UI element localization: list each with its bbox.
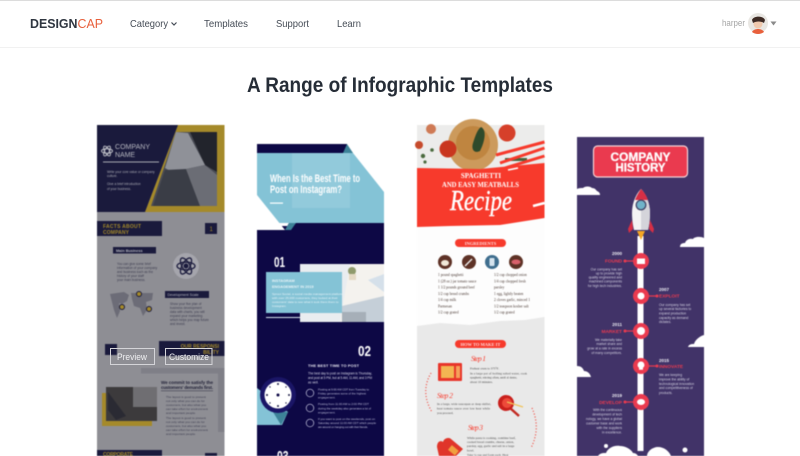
ingredient list: parsley bbox=[494, 286, 505, 290]
cover block bbox=[97, 125, 224, 212]
step 2 bbox=[437, 391, 523, 416]
brush banner bbox=[417, 142, 544, 227]
cover block: When Is the Best Time to bbox=[270, 173, 360, 185]
commitment block: and important people. bbox=[166, 411, 196, 415]
dotted arrow left bbox=[426, 373, 432, 412]
development scale block: expand your marketing bbox=[170, 314, 203, 318]
best time list: Friday generates some of the highest bbox=[318, 392, 366, 396]
logo: DESIGNCAP bbox=[30, 17, 103, 31]
milestone 2000: quality engineered and bbox=[589, 276, 622, 280]
main business block: Main Business bbox=[116, 249, 143, 253]
button: preview: Preview bbox=[117, 352, 147, 363]
section 01 bbox=[266, 254, 384, 322]
commitment block: can take effort for environment bbox=[166, 428, 208, 432]
section 01: with over 25,000 customers, they looked at their bbox=[272, 296, 338, 300]
milestone 2007: up several factories to bbox=[659, 307, 691, 311]
main business block: You can give some brief bbox=[117, 262, 151, 266]
main business block bbox=[113, 247, 199, 282]
panel: template 2 instagram bbox=[257, 144, 384, 456]
milestone 2015: technological innovation bbox=[659, 382, 694, 386]
ingredient list: 1/2 teaspoon kosher salt bbox=[494, 304, 529, 308]
clock graphic bbox=[257, 377, 296, 425]
commitment block: The layout is good to present bbox=[166, 416, 206, 420]
milestone 2011: grow at a rate in excess bbox=[587, 346, 622, 350]
dotted arrow right bbox=[531, 408, 536, 448]
step 3: bowl. bbox=[467, 448, 474, 452]
section 01: Sprout Social, a social media management platform bbox=[272, 292, 343, 296]
step 2: heat tomato sauce over low heat while bbox=[437, 406, 491, 410]
step 2: Step 2 bbox=[437, 391, 453, 400]
milestone 2000: up to provide high bbox=[596, 272, 622, 276]
commitment block: We commit to satisfy the bbox=[161, 380, 213, 385]
icon: oven mitt bbox=[437, 438, 463, 456]
icon: atom bbox=[102, 145, 112, 157]
milestone 2011: of many competitors. bbox=[591, 351, 622, 355]
milestone 2011: We materially take bbox=[595, 338, 622, 342]
best time list: during the weekday also generates a lot of bbox=[318, 406, 371, 410]
title box bbox=[594, 146, 688, 177]
milestone 2000: machined components bbox=[589, 280, 622, 284]
ingredient list: 1/2 cup grated bbox=[438, 310, 459, 314]
ingredient icons bbox=[438, 255, 523, 269]
milestone 2000: for high tech industries. bbox=[588, 284, 622, 288]
step 3: cooked bread crumbs, cheese, onion, bbox=[467, 440, 514, 445]
icon: dropdown caret bbox=[770, 22, 776, 26]
milestone 2019: 2019 bbox=[612, 393, 622, 398]
milestone 2011: MARKET bbox=[601, 329, 622, 335]
milestone 2011: market share and bbox=[596, 342, 622, 346]
step 3 bbox=[437, 423, 516, 456]
development scale block: which helps you map future bbox=[170, 318, 209, 322]
ingredient list: 1 1/2 pounds ground beef bbox=[438, 286, 476, 290]
development scale block bbox=[165, 291, 209, 326]
ingredient list: 1/4 cup milk bbox=[438, 298, 456, 302]
section 02: THE BEST TIME TO POST bbox=[308, 363, 360, 368]
milestone 2007: 2007 bbox=[659, 287, 670, 292]
milestone 2019: development of tech bbox=[592, 412, 622, 416]
cover block: culture. bbox=[107, 174, 118, 178]
development scale block: Development Scale bbox=[168, 293, 199, 297]
clouds bbox=[577, 186, 704, 456]
best time list: engagement. bbox=[318, 396, 336, 400]
milestone 2007: expand production bbox=[659, 312, 686, 316]
milestone 2015: and competitiveness of bbox=[659, 386, 693, 390]
commitment block: customers' demands first. bbox=[161, 385, 213, 390]
commitment block bbox=[102, 380, 213, 436]
commitment block: not only what you can do for bbox=[166, 420, 205, 424]
how to make it pill: HOW TO MAKE IT bbox=[461, 342, 500, 347]
ingredient list: 1 pound spaghetti bbox=[438, 273, 464, 277]
step 1: Step 1 bbox=[471, 354, 486, 363]
button: customize bbox=[166, 348, 212, 364]
timeline line bbox=[638, 236, 644, 451]
milestone 2015 bbox=[633, 358, 694, 395]
milestone 2019: with the suppliers bbox=[597, 426, 622, 430]
cover block bbox=[257, 144, 384, 230]
main business block: information of your company bbox=[117, 266, 158, 270]
ingredients pill: INGREDIENTS bbox=[465, 241, 497, 246]
commitment block: and important people. bbox=[166, 432, 196, 436]
milestone 2011: 2011 bbox=[612, 322, 622, 327]
commitment block: customers, but also what you bbox=[166, 424, 206, 428]
section 02: The best day to post on Instagram is Thursday, bbox=[308, 372, 372, 376]
ingredient list bbox=[438, 273, 530, 314]
section 02: 02 bbox=[358, 343, 371, 360]
navigation bar bbox=[0, 0, 800, 48]
button: customize: Customize bbox=[169, 352, 209, 363]
milestone 2007: dictates. bbox=[659, 320, 671, 324]
menu: support: Support bbox=[276, 18, 309, 30]
step 1: In a large pot of boiling salted water, cook bbox=[470, 372, 527, 376]
section 01: customers' data to see what it took them them to bbox=[272, 300, 339, 304]
brush banner: SPAGHETTI bbox=[461, 172, 501, 180]
cover block: COMPANY bbox=[115, 144, 150, 151]
title: A Range of Infographic Templates bbox=[247, 74, 553, 97]
title box: COMPANY bbox=[610, 152, 671, 164]
section heading: corporate bbox=[97, 450, 217, 456]
section heading: facts about company: COMPANY bbox=[103, 230, 130, 236]
menu: templates: Templates bbox=[204, 18, 248, 30]
icon: saucepan bbox=[498, 395, 523, 416]
best time list: Posting at 9:00 AM CDT from Tuesday to bbox=[318, 388, 369, 392]
steps area bbox=[417, 317, 544, 456]
milestone 2019 bbox=[586, 393, 649, 434]
step 3: parsley, egg, garlic and salt in a large bbox=[467, 444, 515, 449]
milestone 2007: EXPLOIT bbox=[659, 294, 680, 300]
step 2: you proceed. bbox=[437, 411, 454, 415]
world map with pins bbox=[110, 292, 153, 318]
cover block: of your business. bbox=[107, 187, 131, 191]
section 02: and post at 5 PM, but at 5 AM, 11 AM, and 3 PM bbox=[308, 376, 372, 380]
panel: template 1 company profile (hover state) bbox=[97, 125, 224, 456]
section 02: as well. bbox=[308, 380, 319, 384]
milestone 2015: INNOVATE bbox=[659, 364, 684, 370]
main business block: and business such as the bbox=[117, 270, 153, 274]
milestone 2019: With the continuous bbox=[593, 408, 622, 412]
best time list: Saturday around 11:00 AM CDT which people bbox=[318, 421, 376, 425]
step 3: While pasta is cooking, combine beef, bbox=[467, 436, 516, 441]
step 1: about 10 minutes. bbox=[470, 380, 493, 384]
user name: harper bbox=[722, 18, 745, 29]
button: preview bbox=[110, 348, 154, 364]
step 2: In a large, wide saucepan or deep skillet, bbox=[437, 402, 491, 407]
menu: learn: Learn bbox=[337, 18, 361, 30]
development scale block: business development bbox=[170, 306, 202, 310]
panel: template 3 recipe bbox=[415, 119, 544, 456]
best time list bbox=[306, 388, 376, 429]
panel: template 4 company history bbox=[577, 137, 704, 456]
best time list: engagement. bbox=[318, 410, 336, 414]
main business block: history of your staff bbox=[117, 274, 144, 278]
ingredient list: 1/2 cup bread crumbs bbox=[438, 292, 470, 296]
milestone 2019: customer base and work bbox=[586, 422, 622, 426]
icon: user avatar bbox=[748, 13, 768, 34]
commitment block: customers, but also what you bbox=[166, 403, 206, 407]
section 01: 01 bbox=[274, 254, 285, 271]
step 1: spaghetti, stirring often, until al dente, bbox=[470, 376, 517, 380]
cover block: Post on Instagram? bbox=[270, 184, 342, 196]
best time list: Posting from 11:00 AM to 2:00 PM CDT bbox=[318, 402, 369, 406]
milestone 2007 bbox=[633, 287, 691, 324]
brush banner: Recipe bbox=[449, 186, 512, 217]
cover block: NAME bbox=[115, 152, 135, 159]
section 01: ENGAGEMENT IN 2019 bbox=[272, 285, 314, 289]
icon: atom bbox=[177, 256, 195, 276]
milestone 2015: products. bbox=[659, 391, 673, 395]
section 01: Instagram. bbox=[272, 304, 287, 308]
step 1: Preheat oven to 375°F. bbox=[470, 366, 499, 370]
best time list: are around on hanging out with their friends. bbox=[318, 425, 368, 429]
milestone 2000: 2000 bbox=[612, 251, 622, 256]
section heading: facts about company bbox=[97, 221, 217, 236]
ingredient list: Parmesan bbox=[438, 304, 452, 308]
milestone 2019: in excellence. bbox=[602, 430, 622, 434]
ingredients pill bbox=[455, 239, 506, 247]
ingredient list: 1/4 cup chopped fresh bbox=[494, 280, 526, 284]
title box: HISTORY bbox=[616, 162, 666, 174]
cover block: Give a brief introduction bbox=[107, 182, 141, 186]
milestone 2000 bbox=[588, 251, 649, 288]
ingredient list: 2 cloves garlic, minced 1 bbox=[494, 298, 530, 303]
commitment block: not only what you can do for bbox=[166, 399, 205, 403]
icon: rocket bbox=[628, 189, 654, 240]
section 02 bbox=[257, 343, 376, 429]
cover block: Write your core value or company bbox=[107, 170, 155, 174]
section heading: facts about company: 1 bbox=[210, 227, 214, 233]
milestone 2015: We are keeping bbox=[659, 373, 682, 377]
best time list: If you want to post on the weekends, post on bbox=[318, 417, 375, 421]
ingredient list: 1 egg, lightly beaten bbox=[494, 292, 524, 297]
development scale block: data with charts, you will bbox=[170, 310, 205, 314]
ingredient list: 1/2 cup grated bbox=[494, 310, 515, 314]
menu: category: Category bbox=[130, 18, 169, 30]
section heading: our responsibility: OUR RESPONSI bbox=[181, 344, 220, 350]
development scale block: Show your five plan of bbox=[170, 302, 201, 306]
section heading: our responsibility bbox=[105, 341, 224, 356]
milestone 2007: capacity as demand bbox=[659, 316, 688, 320]
milestone 2015: improve the ability of bbox=[659, 378, 689, 382]
section 01: INSTAGRAM bbox=[272, 279, 295, 283]
commitment block: can take effort for environment bbox=[166, 407, 208, 411]
development scale block: and invest. bbox=[170, 322, 186, 326]
milestone 2000: FOUND bbox=[605, 258, 623, 264]
food photo bbox=[415, 119, 544, 173]
step 3: Step 3 bbox=[468, 423, 483, 432]
ingredient list: 1 (28 oz.) jar tomato sauce bbox=[438, 280, 477, 284]
milestone 2019: nology, we have a global bbox=[586, 417, 622, 421]
section heading: our responsibility: BILITY bbox=[203, 350, 220, 356]
main business block: your main business. bbox=[117, 278, 145, 282]
milestone 2007: Our company has set bbox=[659, 303, 690, 307]
milestone 2011 bbox=[587, 322, 649, 355]
commitment block: The layout is good to present bbox=[166, 395, 206, 399]
step 1 bbox=[438, 354, 527, 384]
milestone 2000: Our company has set bbox=[591, 268, 622, 272]
section heading: facts about company: FACTS ABOUT bbox=[103, 224, 141, 230]
ingredient list: 1/2 cup chopped onion bbox=[494, 273, 527, 277]
milestone 2019: DEVELOP bbox=[599, 400, 623, 406]
brush banner: AND EASY MEATBALLS bbox=[442, 181, 519, 189]
milestone 2015: 2015 bbox=[659, 358, 670, 363]
